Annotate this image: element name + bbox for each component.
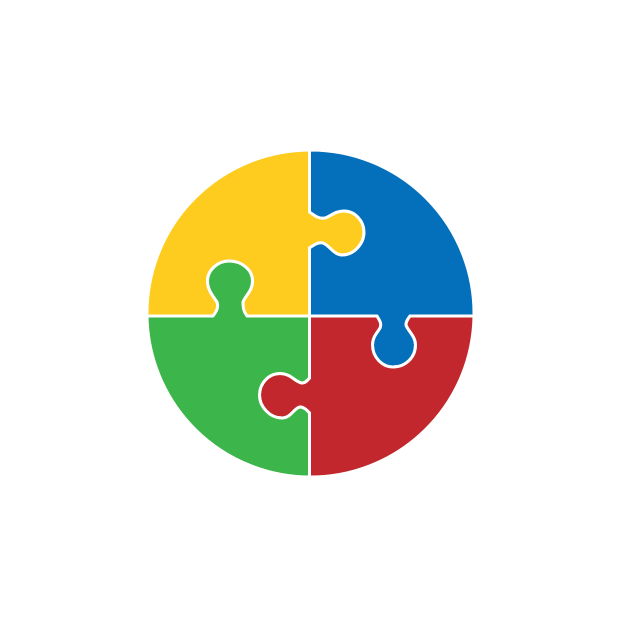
puzzle piece: red bottom-right <box>260 316 474 477</box>
puzzle piece: blue top-right <box>310 150 474 367</box>
puzzle piece: green bottom-left <box>147 261 310 477</box>
puzzle piece: yellow top-left <box>147 150 364 316</box>
